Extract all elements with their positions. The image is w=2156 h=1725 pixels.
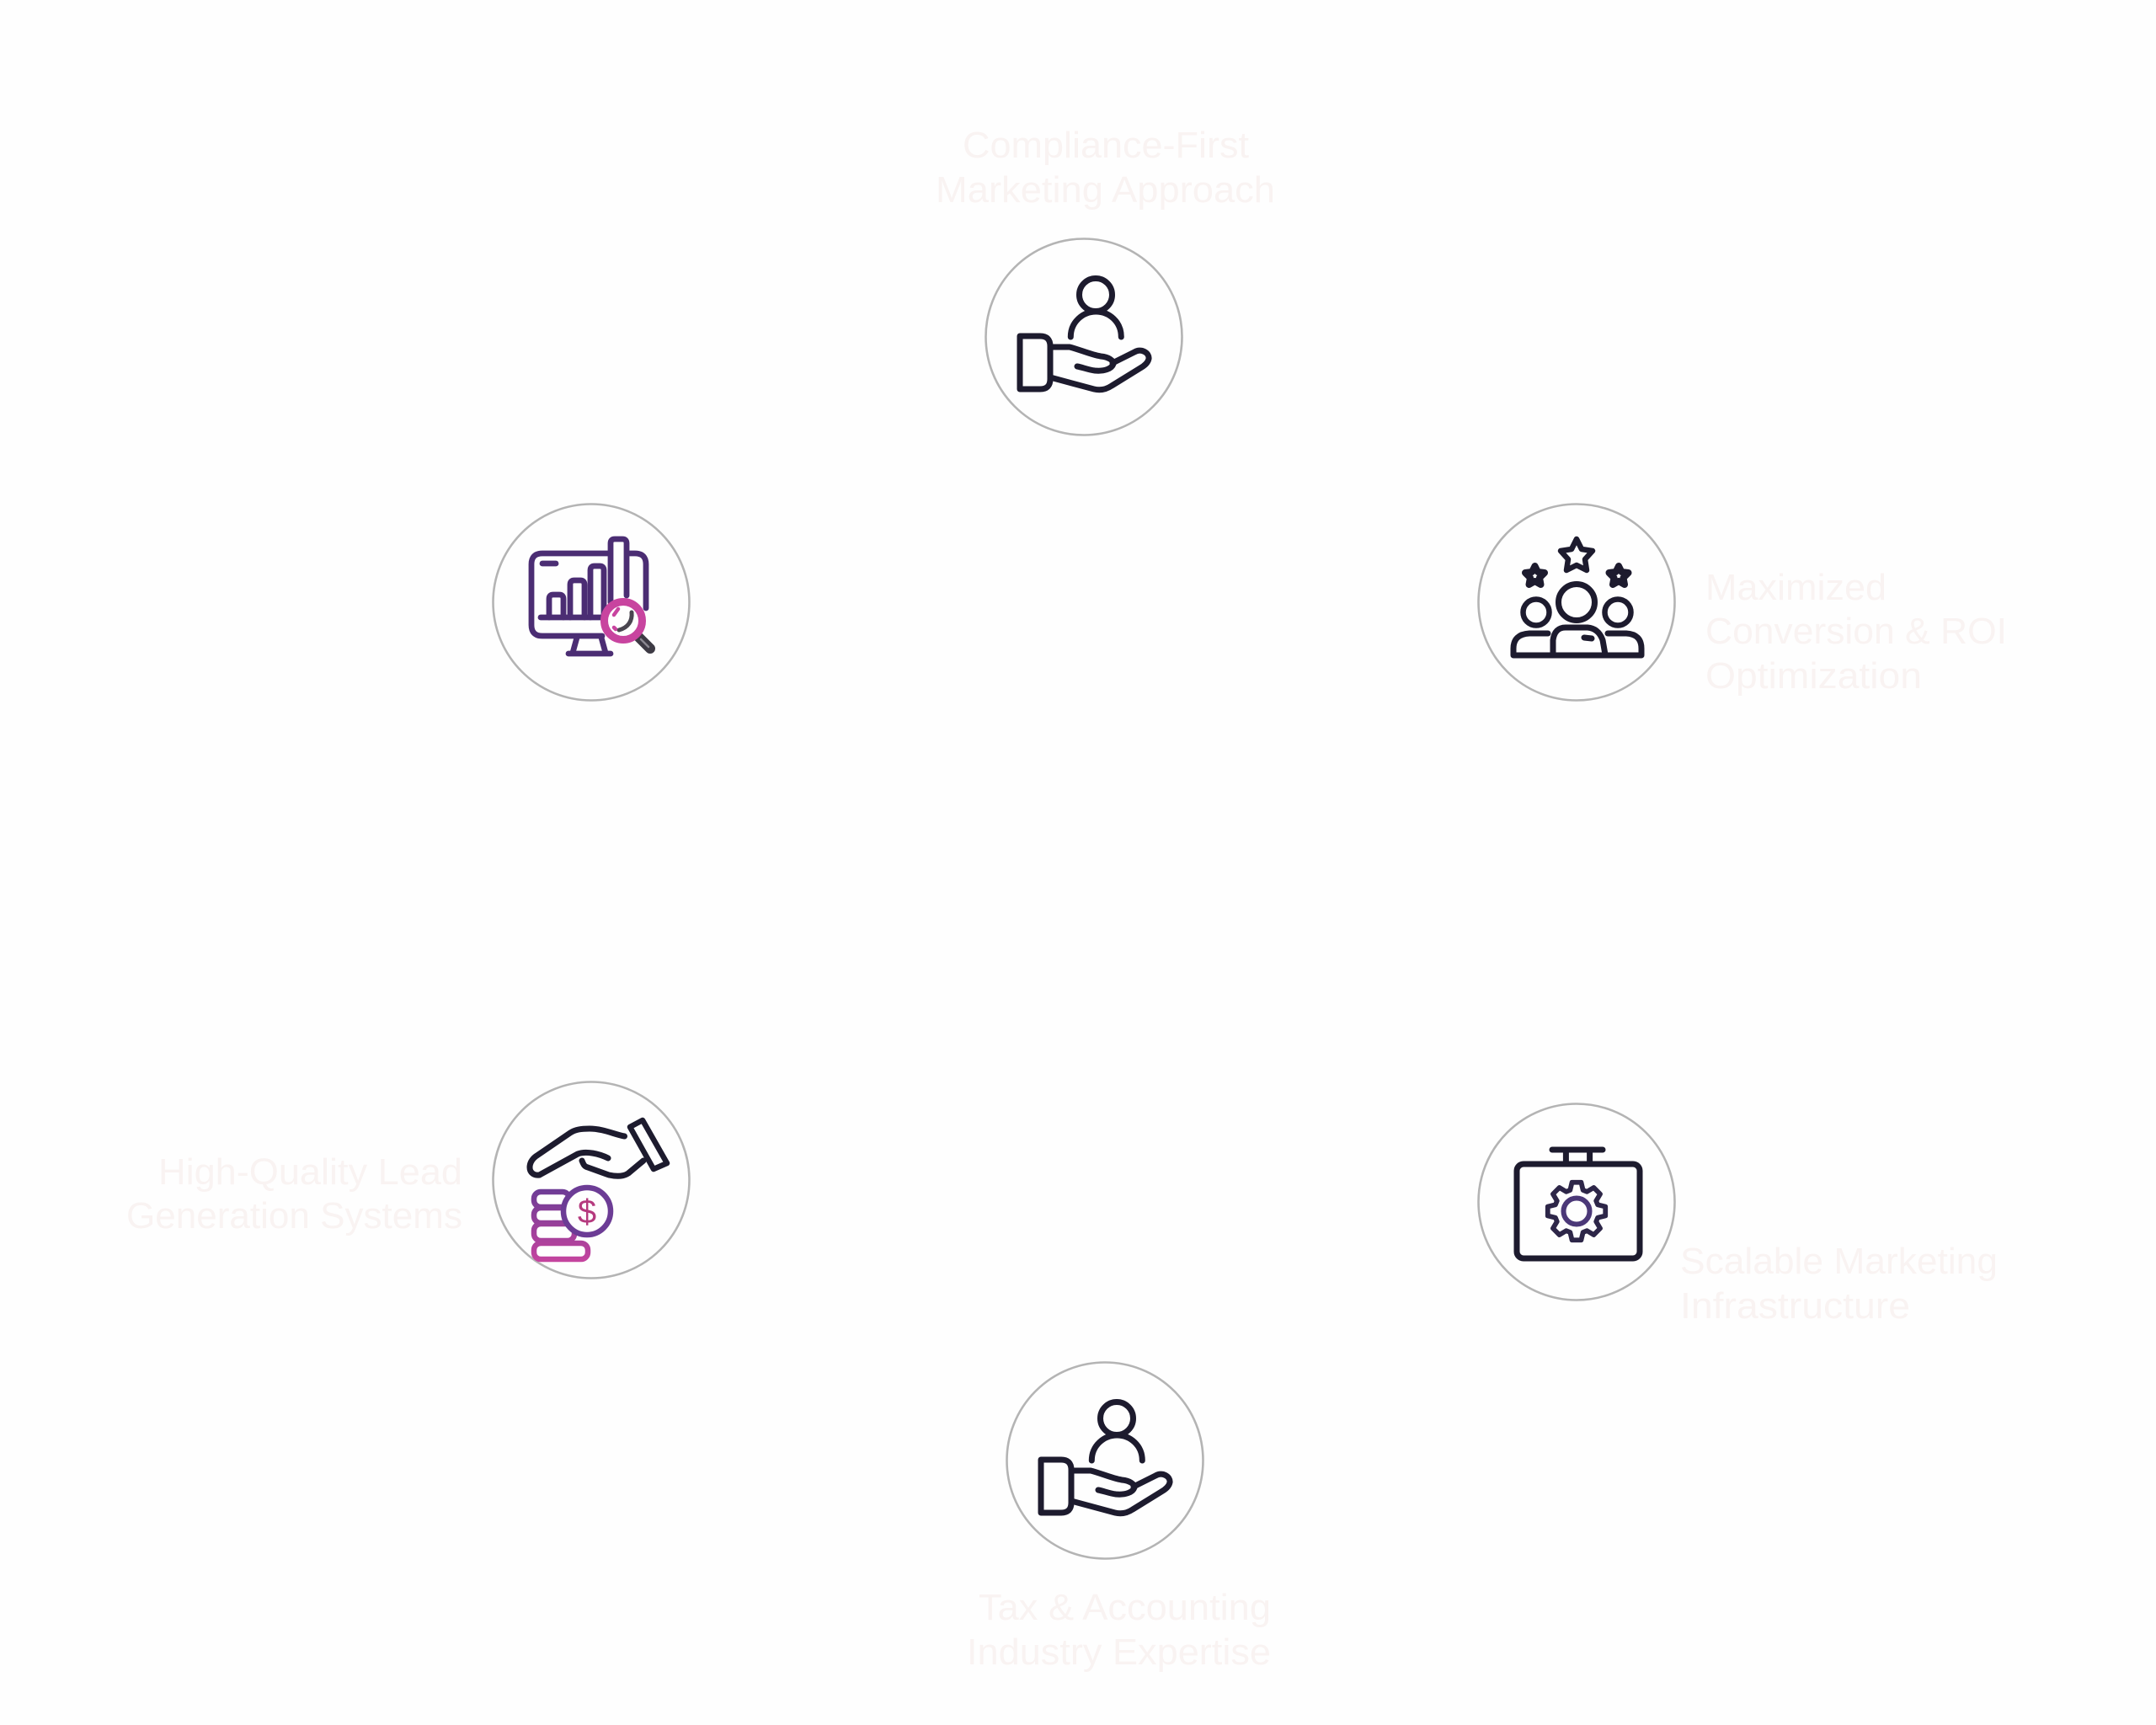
node: data analytics <box>494 504 689 701</box>
node: lead generation <box>126 1081 689 1279</box>
circle: compliance-first <box>985 239 1182 435</box>
heading: compliance-first: Marketing Approach <box>936 169 1275 211</box>
heading: scalable infrastructure <box>1680 1241 1998 1327</box>
icon: team with stars <box>1513 539 1641 655</box>
heading: scalable infrastructure: Infrastructure <box>1680 1285 1910 1327</box>
circle: scalable infrastructure <box>1479 1103 1674 1300</box>
icon: hand holding person <box>1041 1402 1170 1514</box>
node: maximized conversion <box>1479 504 2007 701</box>
heading: industry expertise: Tax & Accounting <box>979 1587 1271 1628</box>
heading: lead generation: High-Quality Lead <box>158 1151 462 1193</box>
node: compliance-first <box>936 125 1275 435</box>
heading: scalable infrastructure: Scalable Marketing <box>1680 1241 1998 1282</box>
heading: maximized conversion: Optimization <box>1705 655 1922 697</box>
heading: compliance-first <box>936 125 1275 211</box>
heading: industry expertise <box>967 1587 1271 1673</box>
icon: hand over coins: $ <box>578 1194 596 1231</box>
node: industry expertise <box>967 1363 1271 1673</box>
icon: hand holding person <box>1020 278 1149 390</box>
circle: lead generation <box>494 1081 689 1279</box>
icon: hand over coins <box>530 1120 667 1259</box>
heading: maximized conversion <box>1705 567 2007 697</box>
heading: lead generation: Generation Systems <box>126 1195 462 1236</box>
heading: maximized conversion: Maximized <box>1705 567 1886 608</box>
circle: maximized conversion <box>1479 504 1674 701</box>
circle: data analytics <box>494 504 689 701</box>
circle: industry expertise <box>1007 1363 1203 1558</box>
icon: briefcase with gear <box>1517 1150 1640 1258</box>
heading: lead generation <box>126 1151 462 1236</box>
heading: maximized conversion: Conversion & ROI <box>1705 611 2007 652</box>
icon: monitor chart with magnifier <box>531 539 650 654</box>
heading: compliance-first: Compliance-First <box>963 125 1249 166</box>
node: scalable infrastructure <box>1479 1103 1998 1327</box>
heading: industry expertise: Industry Expertise <box>967 1632 1271 1673</box>
